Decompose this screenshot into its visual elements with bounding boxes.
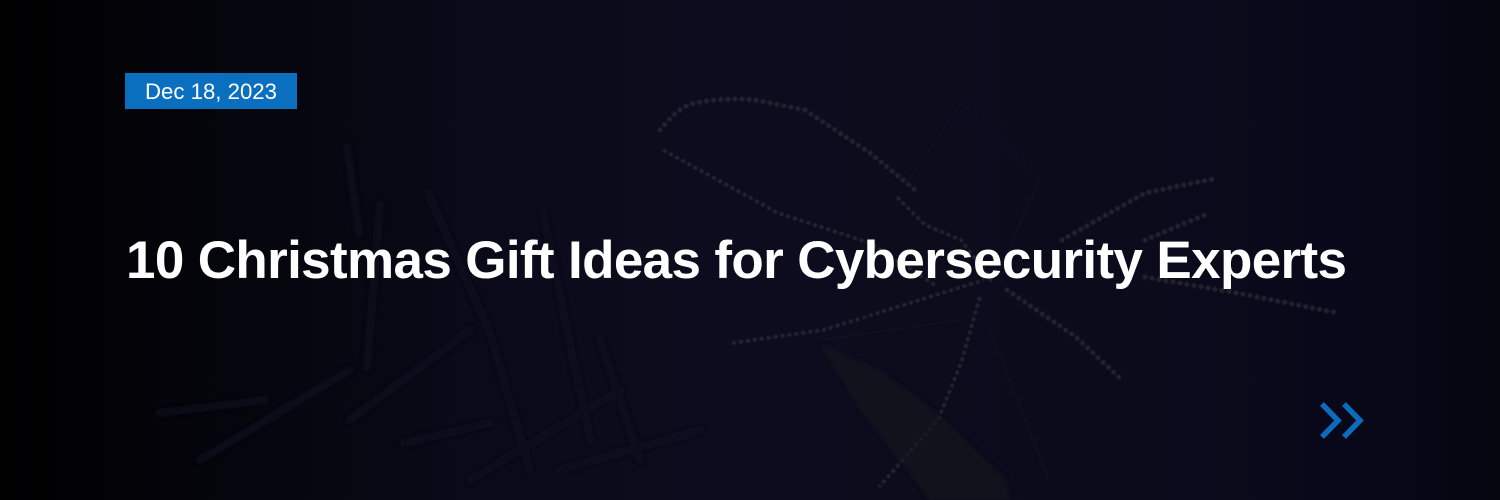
title: 10 Christmas Gift Ideas for Cybersecurity Experts: [126, 231, 1347, 290]
date badge: [125, 73, 297, 109]
date badge: Dec 18, 2023: [145, 79, 277, 104]
icon: double chevron arrow: [1320, 402, 1364, 439]
